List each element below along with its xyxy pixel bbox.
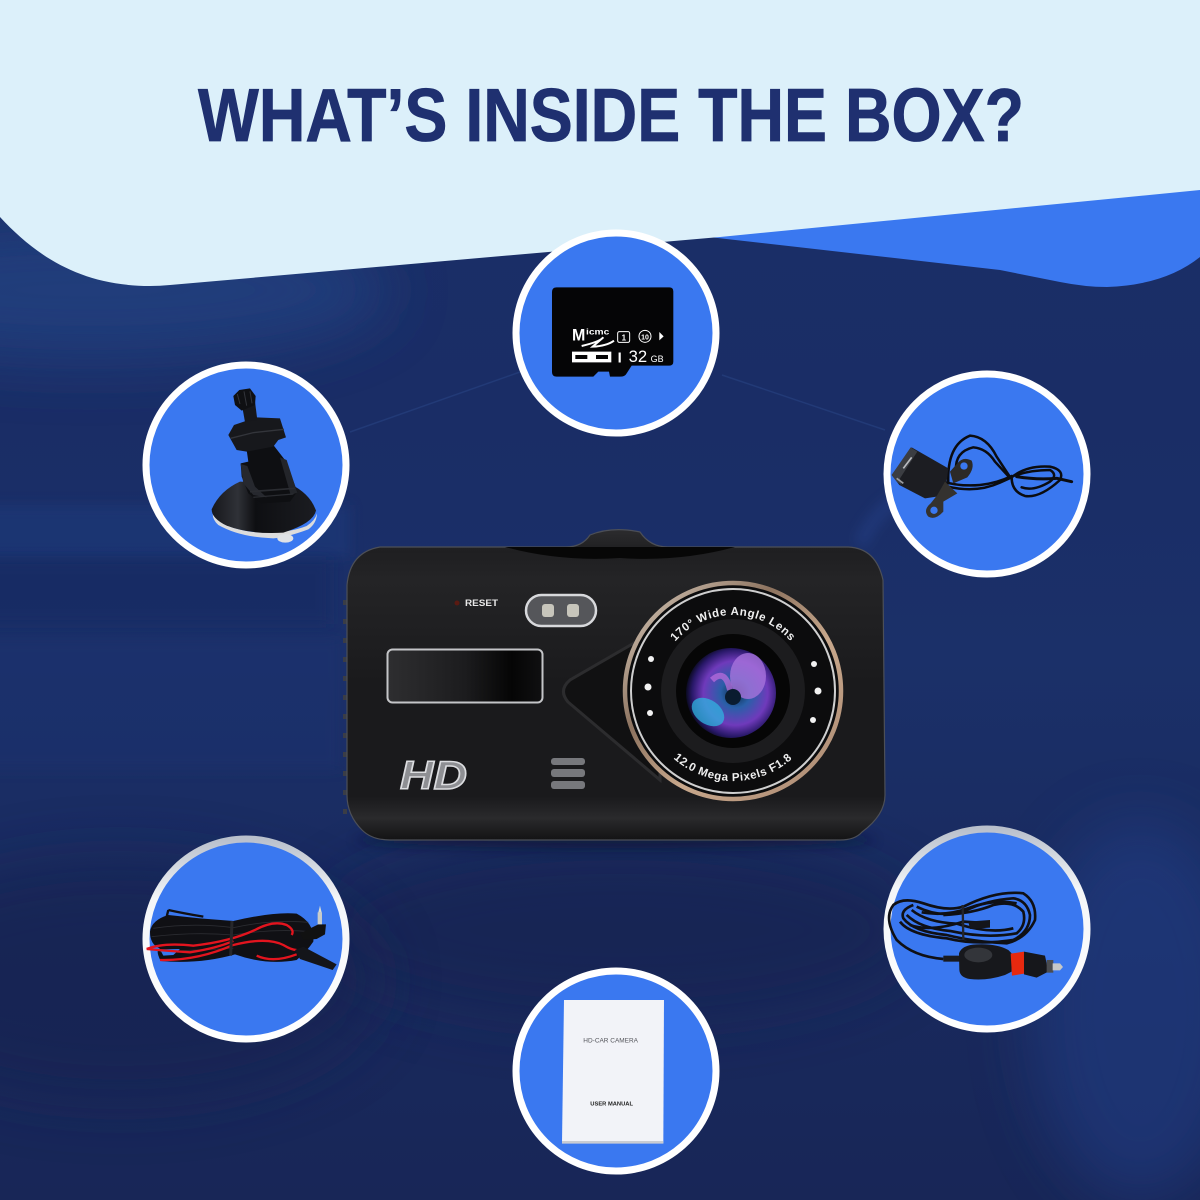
icon: cigarette lighter plug body: [943, 956, 960, 962]
card label: I: [618, 350, 622, 366]
lens bezel wedge: [563, 628, 660, 780]
manual cover subtitle: USER MANUAL: [590, 1102, 634, 1108]
icon: cable ties: [231, 921, 232, 956]
card label: M: [572, 326, 585, 345]
dash camera: [343, 529, 886, 852]
camera body: [347, 530, 885, 840]
camera shadow: [355, 832, 875, 848]
HD logo: HD: [400, 754, 467, 798]
lens text top: 170° Wide Angle Lens: [670, 607, 794, 642]
icon: black cable bundle: [150, 913, 313, 962]
item circle: rear camera: [887, 374, 1087, 574]
card label: 1: [622, 333, 627, 342]
lens assembly: [622, 580, 844, 802]
item circle: user manual: [516, 971, 716, 1171]
header panel: light blue wave: [0, 0, 1200, 286]
title: WHAT’S INSIDE THE BOX?: [198, 73, 1024, 157]
icon: charger cable coil: [889, 893, 1035, 959]
lens glass: [686, 648, 776, 738]
screen window: [388, 650, 542, 702]
icon: suction cup base: [213, 513, 317, 538]
icon: angled 3.500mm jack: [300, 924, 326, 940]
card label: [572, 326, 664, 366]
icon: barrel plug: [295, 947, 337, 970]
icon: camera body: [892, 447, 948, 498]
icon: red wires: [147, 923, 297, 960]
card label: icmc: [586, 327, 610, 337]
icon: manual booklet: [562, 1000, 664, 1143]
icon: 32GB micro SD card: [552, 287, 673, 377]
card label: 32: [629, 347, 647, 366]
manual cover title: HD-CAR CAMERA: [583, 1038, 638, 1044]
reset label: [454, 598, 499, 608]
icon: mounting bracket: [926, 482, 957, 518]
item circle: memory card: [516, 233, 716, 433]
LED flash pill: [526, 595, 596, 626]
icon: camera cable loops: [943, 436, 1072, 496]
item circle: car charger: [887, 829, 1087, 1029]
item circle: suction mount: [146, 365, 346, 565]
IR LEDs: [644, 656, 822, 723]
item circle: rear camera extension cable: [146, 839, 346, 1039]
card label: GB: [651, 354, 664, 364]
speaker grille: [551, 758, 585, 789]
card label: 10: [641, 334, 649, 341]
icon: red band: [1011, 952, 1024, 976]
reset label: RESET: [465, 598, 499, 608]
lens text bottom: 12.0 Mega Pixels F1.8: [674, 754, 792, 782]
side buttons: [343, 600, 347, 825]
icon: mount arm: [241, 445, 297, 503]
icon: thread stem and knob: [242, 402, 257, 422]
blue accent wave: [700, 188, 1200, 287]
